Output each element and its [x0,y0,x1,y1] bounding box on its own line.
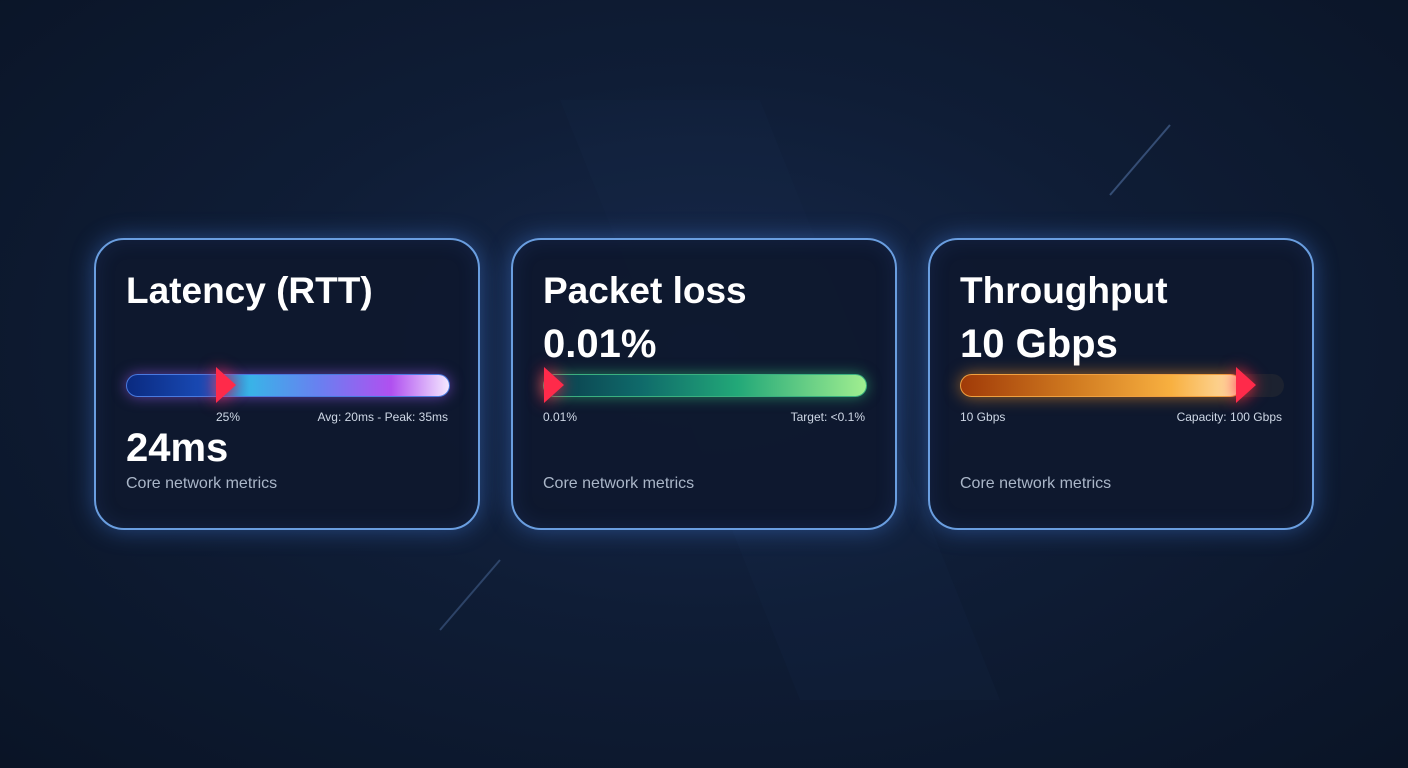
subtitle: Core network metrics [126,475,277,492]
panel: latency: Avg: 20ms - Peak: 35ms [318,410,448,424]
marker [544,367,564,403]
heading: Throughput [960,270,1168,311]
heading: Latency (RTT) [126,270,373,311]
labels: 0.01% [543,410,577,424]
labels: 25% [216,410,240,424]
marker [216,367,236,403]
panel: packet loss: Target: <0.1% [791,410,865,424]
value: 10 Gbps [960,322,1118,366]
panel: latency [94,238,480,530]
heading: Packet loss [543,270,747,311]
bar [126,374,450,397]
labels: 10 Gbps [960,410,1005,424]
value: 0.01% [543,322,656,366]
subtitle: Core network metrics [543,475,694,492]
panel: throughput [928,238,1314,530]
panel: throughput: Capacity: 100 Gbps [1177,410,1282,424]
bar [543,374,867,397]
bar [960,374,1284,397]
panel: packet loss [511,238,897,530]
subtitle: Core network metrics [960,475,1111,492]
marker [1236,367,1256,403]
value: 24ms [126,426,228,470]
